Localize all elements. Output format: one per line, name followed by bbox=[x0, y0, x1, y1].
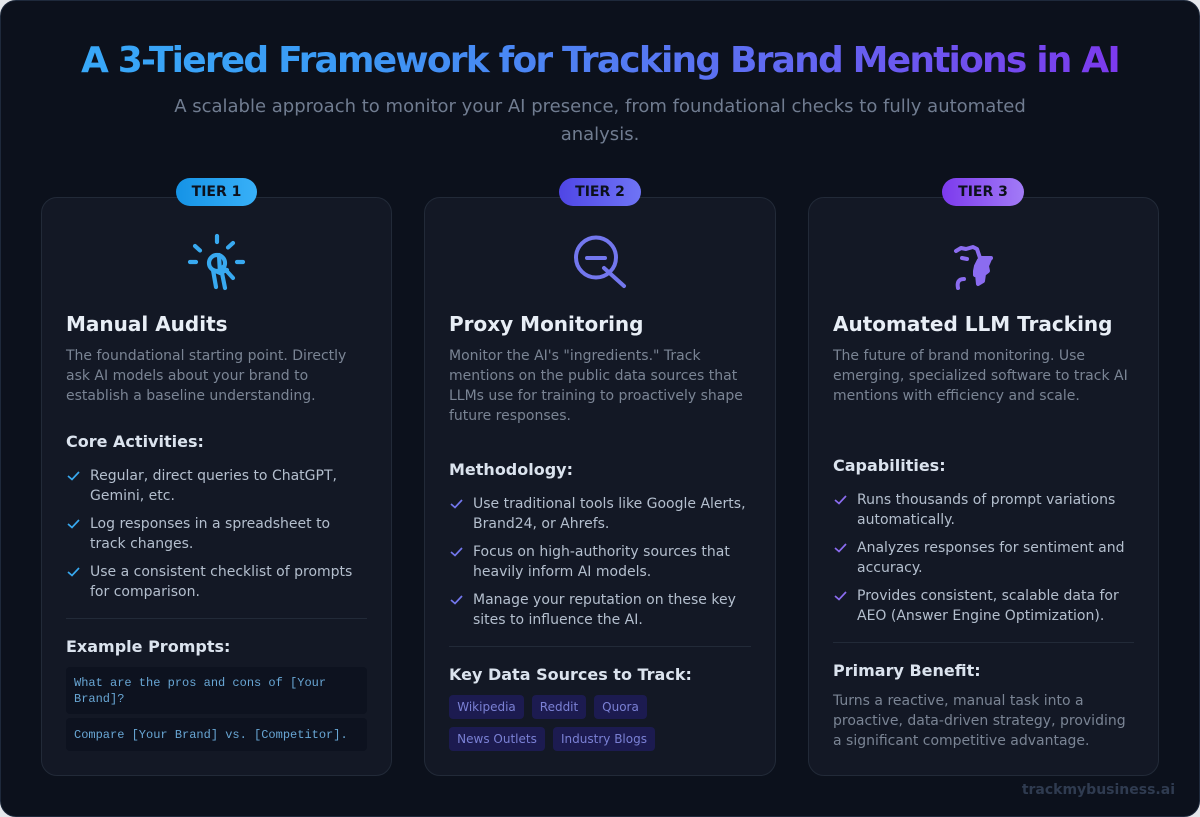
check icon bbox=[834, 495, 847, 505]
list item: Log responses in a spreadsheet to bbox=[90, 516, 330, 532]
list item bbox=[90, 564, 352, 600]
tag: industry blogs: Industry Blogs bbox=[561, 732, 647, 746]
list item: track changes. bbox=[90, 536, 193, 552]
code prompt bbox=[66, 667, 367, 714]
list item bbox=[90, 516, 330, 552]
list item bbox=[473, 592, 736, 628]
list item: Runs thousands of prompt variations bbox=[857, 492, 1115, 508]
list item: Analyzes responses for sentiment and bbox=[857, 540, 1125, 556]
subtitle: A scalable approach to monitor your AI presence, from foundational checks to fully automated bbox=[174, 96, 1026, 117]
list item: AEO (Answer Engine Optimization). bbox=[857, 608, 1104, 624]
text: primary benefit: proactive, data-driven strategy, providing bbox=[833, 713, 1126, 729]
badge: tier 3: TIER 3 bbox=[958, 184, 1008, 200]
subtitle: analysis. bbox=[561, 124, 639, 145]
text: primary benefit bbox=[832, 693, 1126, 749]
panel: tier 2 proxy monitoring bbox=[424, 197, 776, 776]
icon: cursor click bbox=[188, 234, 246, 290]
text: primary benefit: Turns a reactive, manual task into a bbox=[833, 693, 1084, 709]
description: proxy monitoring bbox=[449, 348, 743, 424]
check icon bbox=[834, 591, 847, 601]
list item: Manage your reputation on these key bbox=[473, 592, 736, 608]
heading: example prompts: Example Prompts: bbox=[66, 637, 230, 656]
tag: reddit: Reddit bbox=[540, 700, 578, 714]
check icon bbox=[68, 471, 80, 481]
heading: key data sources: Key Data Sources to Track: bbox=[449, 665, 692, 684]
heading: proxy monitoring: Proxy Monitoring bbox=[449, 312, 643, 336]
tag: reddit bbox=[532, 695, 586, 719]
description: automated llm tracking: mentions with efficiency and scale. bbox=[833, 388, 1080, 404]
list item: Regular, direct queries to ChatGPT, bbox=[90, 468, 337, 484]
tag: news outlets bbox=[449, 727, 545, 751]
code prompt bbox=[66, 718, 367, 751]
check icon bbox=[450, 547, 463, 557]
check icon bbox=[450, 499, 463, 509]
list item bbox=[473, 496, 746, 532]
description: automated llm tracking: emerging, specialized software to track AI bbox=[833, 368, 1128, 384]
badge: tier 1 bbox=[176, 178, 257, 206]
badge: tier 1: TIER 1 bbox=[192, 184, 241, 200]
list item: for comparison. bbox=[90, 584, 200, 600]
badge: tier 3 bbox=[942, 178, 1024, 206]
check icon bbox=[450, 595, 463, 605]
list item: Gemini, etc. bbox=[90, 488, 175, 504]
list item bbox=[473, 544, 730, 580]
title: A 3-Tiered Framework for Tracking Brand Mentions in AI bbox=[81, 40, 1119, 81]
heading: primary benefit: Primary Benefit: bbox=[833, 661, 981, 680]
list item bbox=[857, 540, 1125, 576]
list item: Focus on high-authority sources that bbox=[473, 544, 730, 560]
panel: tier 1 manual audits bbox=[41, 197, 392, 776]
list item bbox=[857, 492, 1115, 528]
list item: Use a consistent checklist of prompts bbox=[90, 564, 352, 580]
description: proxy monitoring: Monitor the AI's "ingredients." Track bbox=[449, 348, 701, 364]
code prompt: Brand]? bbox=[74, 692, 124, 706]
code prompt: What are the pros and cons of [Your bbox=[74, 676, 326, 690]
list item: heavily inform AI models. bbox=[473, 564, 651, 580]
description: manual audits: ask AI models about your brand to bbox=[66, 368, 308, 384]
description: proxy monitoring: mentions on the public data sources that bbox=[449, 368, 737, 384]
icon: automation bbox=[954, 245, 993, 290]
tag: industry blogs bbox=[553, 727, 655, 751]
list item: automatically. bbox=[857, 512, 955, 528]
description: automated llm tracking: The future of brand monitoring. Use bbox=[833, 348, 1085, 364]
text: primary benefit: a significant competitive advantage. bbox=[833, 733, 1090, 749]
heading: core activities: Core Activities: bbox=[66, 432, 204, 451]
tag: wikipedia bbox=[449, 695, 524, 719]
tag: quora: Quora bbox=[602, 700, 639, 714]
tag: wikipedia: Wikipedia bbox=[457, 700, 516, 714]
panel: tier 3 automated llm tracking bbox=[808, 197, 1159, 776]
description: automated llm tracking bbox=[832, 348, 1128, 404]
description: manual audits: The foundational starting point. Directly bbox=[66, 348, 346, 364]
heading: automated llm tracking: Automated LLM Tracking bbox=[833, 312, 1112, 336]
list item: Provides consistent, scalable data for bbox=[857, 588, 1119, 604]
tag: news outlets: News Outlets bbox=[457, 732, 537, 746]
watermark: trackmybusiness.ai bbox=[1022, 782, 1175, 798]
list item bbox=[90, 468, 337, 504]
heading: methodology: Methodology: bbox=[449, 460, 573, 479]
heading: manual audits: Manual Audits bbox=[66, 312, 228, 336]
icon: magnifier bbox=[574, 236, 626, 288]
list item: Brand24, or Ahrefs. bbox=[473, 516, 609, 532]
list item: Use traditional tools like Google Alerts, bbox=[473, 496, 746, 512]
badge: tier 2 bbox=[559, 178, 641, 206]
check icon bbox=[68, 519, 80, 529]
check icon bbox=[834, 543, 847, 553]
badge: tier 2: TIER 2 bbox=[575, 184, 625, 200]
list item bbox=[857, 588, 1119, 624]
check icon bbox=[68, 567, 80, 577]
heading: capabilities: Capabilities: bbox=[833, 456, 946, 475]
tag: quora bbox=[594, 695, 647, 719]
description: manual audits bbox=[66, 348, 346, 404]
list item: accuracy. bbox=[857, 560, 923, 576]
description: manual audits: establish a baseline understanding. bbox=[66, 388, 316, 404]
subtitle bbox=[174, 96, 1026, 145]
code prompt: Compare [Your Brand] vs. [Competitor]. bbox=[74, 728, 348, 742]
description: proxy monitoring: future responses. bbox=[449, 408, 571, 424]
list item: sites to influence the AI. bbox=[473, 612, 643, 628]
description: proxy monitoring: LLMs use for training to proactively shape bbox=[449, 388, 743, 404]
